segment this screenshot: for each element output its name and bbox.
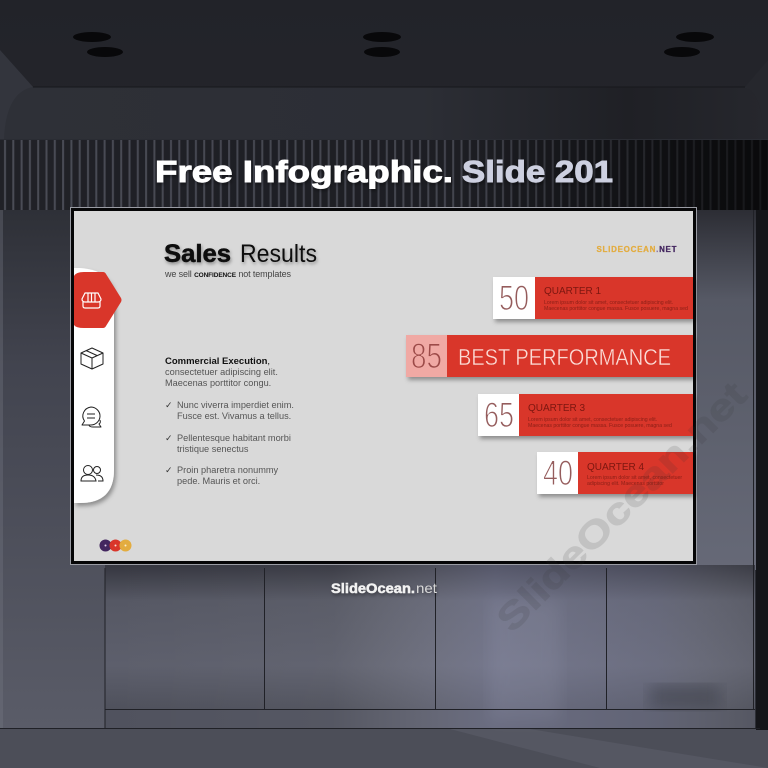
row: quarter 1 xyxy=(493,277,693,319)
checklist: Pellentesque habitant morbi xyxy=(177,433,291,443)
text block: commercial execution: consectetuer adipiscing elit. xyxy=(165,367,278,377)
icon: chat xyxy=(82,407,101,427)
row: quarter 4: QUARTER 4 xyxy=(587,462,644,473)
heading xyxy=(164,240,317,268)
logo dots xyxy=(100,540,132,552)
row: best performance xyxy=(406,335,693,377)
footer brand: SlideOcean. xyxy=(331,580,415,596)
row: quarter 3: QUARTER 3 xyxy=(528,403,585,414)
checklist: ✓ xyxy=(165,465,173,475)
row: quarter 1: Maecenas porttitor congue massa. Fusce posuere, magna sed xyxy=(544,306,688,312)
row: quarter 4: 40 xyxy=(543,454,573,493)
sidebar xyxy=(74,268,122,503)
text block: commercial execution xyxy=(165,356,278,388)
row: quarter 3: Lorem ipsum dolor sit amet, consectetuer adipiscing elit. xyxy=(528,417,657,423)
checklist: Fusce est. Vivamus a tellus. xyxy=(177,411,291,421)
row: quarter 1: Lorem ipsum dolor sit amet, consectetuer adipiscing elit. xyxy=(544,300,673,306)
slide panel xyxy=(74,211,693,561)
row: quarter 4 xyxy=(537,452,693,494)
row: quarter 3: 65 xyxy=(484,396,514,435)
heading: Results xyxy=(240,240,317,268)
subtitle: we sell CONFIDENCE not templates xyxy=(164,269,292,279)
icon: box xyxy=(81,348,103,369)
title xyxy=(155,154,613,189)
title: Slide 201 xyxy=(462,154,613,189)
row: quarter 1: QUARTER 1 xyxy=(544,286,601,297)
active tab: store icon xyxy=(74,272,122,328)
row: quarter 3 xyxy=(478,394,693,436)
heading: Sales xyxy=(164,240,231,268)
checklist xyxy=(165,400,294,486)
footer brand: net xyxy=(416,580,437,596)
row: quarter 1: 50 xyxy=(499,279,529,318)
brand logo text: SLIDEOCEAN.NET xyxy=(596,245,677,254)
title: Free Infographic. xyxy=(155,154,453,189)
row: best performance: BEST PERFORMANCE xyxy=(458,344,671,370)
screen frame xyxy=(70,208,696,564)
checklist: Proin pharetra nonummy xyxy=(177,465,279,475)
text block: commercial execution: Maecenas porttitor congu. xyxy=(165,378,271,388)
text block: commercial execution: Commercial Execution, xyxy=(165,356,270,367)
icon: users xyxy=(81,466,103,481)
row: quarter 3: Maecenas porttitor congue massa. Fusce posuere, magna sed xyxy=(528,423,672,429)
checklist: tristique senectus xyxy=(177,444,249,454)
checklist: ✓ xyxy=(165,433,173,443)
checklist: Nunc viverra imperdiet enim. xyxy=(177,400,294,410)
checklist: ✓ xyxy=(165,400,173,410)
watermark: SlideOcean.net xyxy=(489,374,755,640)
row: quarter 4: Lorem ipsum dolor sit amet, consectetuer xyxy=(587,475,682,481)
row: quarter 4: adipiscing elit. Maecenas porttitor xyxy=(587,481,664,487)
checklist: pede. Mauris et orci. xyxy=(177,476,260,486)
row: best performance: 85 xyxy=(411,337,442,376)
ceiling lights xyxy=(73,32,714,57)
